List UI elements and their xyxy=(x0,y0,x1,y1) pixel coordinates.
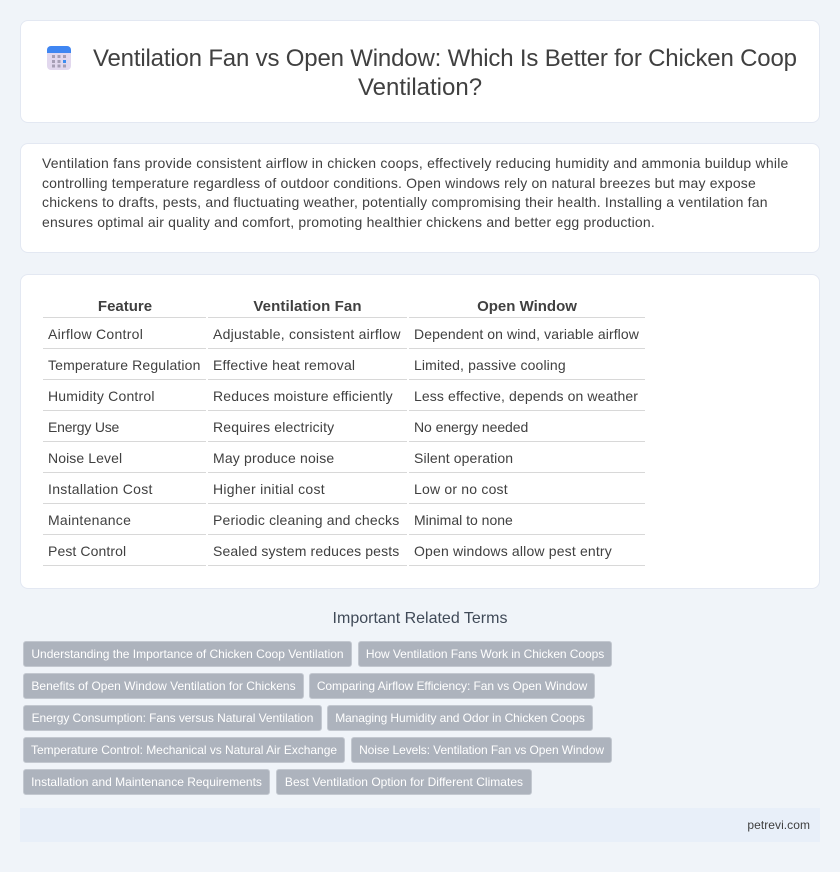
row: humidity control: Less effective, depends on weather xyxy=(414,388,638,404)
row: pest control: Sealed system reduces pests xyxy=(213,543,399,559)
tag xyxy=(327,705,593,731)
row: installation cost: Installation Cost xyxy=(48,481,153,497)
row: temperature regulation: Temperature Regulation xyxy=(48,357,200,373)
table header xyxy=(43,298,645,318)
icon: calendar xyxy=(47,46,71,70)
row: pest control: Pest Control xyxy=(48,543,126,559)
row: airflow control: Dependent on wind, variable airflow xyxy=(414,326,639,342)
table header: Ventilation Fan xyxy=(253,298,362,315)
table header: Open Window xyxy=(477,298,577,315)
row: maintenance: Maintenance xyxy=(48,512,131,528)
heading: important related terms: Important Related Terms xyxy=(333,610,507,627)
row: installation cost: Low or no cost xyxy=(414,481,508,497)
row: humidity control: Reduces moisture efficiently xyxy=(213,388,393,404)
row: noise level: Noise Level xyxy=(48,450,122,466)
row: noise level: Silent operation xyxy=(414,450,513,466)
tag: Comparing Airflow Efficiency: Fan vs Open Window xyxy=(317,679,587,693)
row: energy use: Requires electricity xyxy=(213,419,334,435)
tag: Understanding the Importance of Chicken Coop Ventilation xyxy=(31,647,344,661)
panel: summary xyxy=(20,143,820,253)
row: airflow control: Adjustable, consistent airflow xyxy=(213,326,401,342)
row: airflow control: Airflow Control xyxy=(48,326,143,342)
row: installation cost: Higher initial cost xyxy=(213,481,325,497)
tag: Energy Consumption: Fans versus Natural Ventilation xyxy=(32,711,313,725)
row: energy use: No energy needed xyxy=(414,419,528,435)
panel: header xyxy=(20,20,820,123)
summary text: controlling temperature regardless of outdoor conditions. Open windows rely on natural breezes but may expose xyxy=(42,175,756,191)
summary text: ensures optimal air quality and comfort, promoting healthier chickens and better egg production. xyxy=(42,214,655,230)
tag xyxy=(351,737,612,763)
row: energy use xyxy=(43,419,645,442)
tag: Installation and Maintenance Requirements xyxy=(31,775,262,789)
row: airflow control xyxy=(43,326,645,349)
tag: Benefits of Open Window Ventilation for Chickens xyxy=(31,679,296,693)
row: installation cost xyxy=(43,481,645,504)
table header: Feature xyxy=(98,298,152,315)
row: temperature regulation: Effective heat removal xyxy=(213,357,355,373)
title: Ventilation Fan vs Open Window: Which Is Better for Chicken Coop xyxy=(93,45,797,72)
tag xyxy=(276,769,532,795)
row: noise level xyxy=(43,450,645,473)
row: maintenance xyxy=(43,512,645,535)
tag: Managing Humidity and Odor in Chicken Coops xyxy=(335,711,585,725)
footer source: petrevi.com xyxy=(747,818,810,832)
summary text: chickens to drafts, pests, and fluctuating weather, potentially compromising their health. Installing a ventilation fan xyxy=(42,194,768,210)
row: humidity control xyxy=(43,388,645,411)
tag: How Ventilation Fans Work in Chicken Coops xyxy=(366,647,604,661)
tag: Best Ventilation Option for Different Climates xyxy=(285,775,523,789)
row: maintenance: Minimal to none xyxy=(414,512,513,528)
row: noise level: May produce noise xyxy=(213,450,334,466)
tag xyxy=(358,641,612,667)
tag xyxy=(309,673,595,699)
tag xyxy=(23,769,270,795)
tag: Temperature Control: Mechanical vs Natural Air Exchange xyxy=(31,743,337,757)
related terms tags xyxy=(23,641,612,795)
title xyxy=(93,45,797,101)
row: humidity control: Humidity Control xyxy=(48,388,155,404)
tag xyxy=(23,641,352,667)
footer xyxy=(20,808,820,842)
summary text: Ventilation fans provide consistent airflow in chicken coops, effectively reducing humidity and ammonia buildup while xyxy=(42,155,789,171)
row: maintenance: Periodic cleaning and checks xyxy=(213,512,399,528)
row: energy use: Energy Use xyxy=(48,419,119,435)
summary text xyxy=(42,155,789,230)
row: pest control xyxy=(43,543,645,566)
row: pest control: Open windows allow pest entry xyxy=(414,543,612,559)
tag xyxy=(23,673,304,699)
tag xyxy=(23,705,322,731)
row: temperature regulation: Limited, passive cooling xyxy=(414,357,566,373)
title: Ventilation? xyxy=(358,74,482,101)
panel: comparison table xyxy=(20,274,820,589)
tag xyxy=(23,737,345,763)
tag: Noise Levels: Ventilation Fan vs Open Window xyxy=(359,743,604,757)
row: temperature regulation xyxy=(43,357,645,380)
